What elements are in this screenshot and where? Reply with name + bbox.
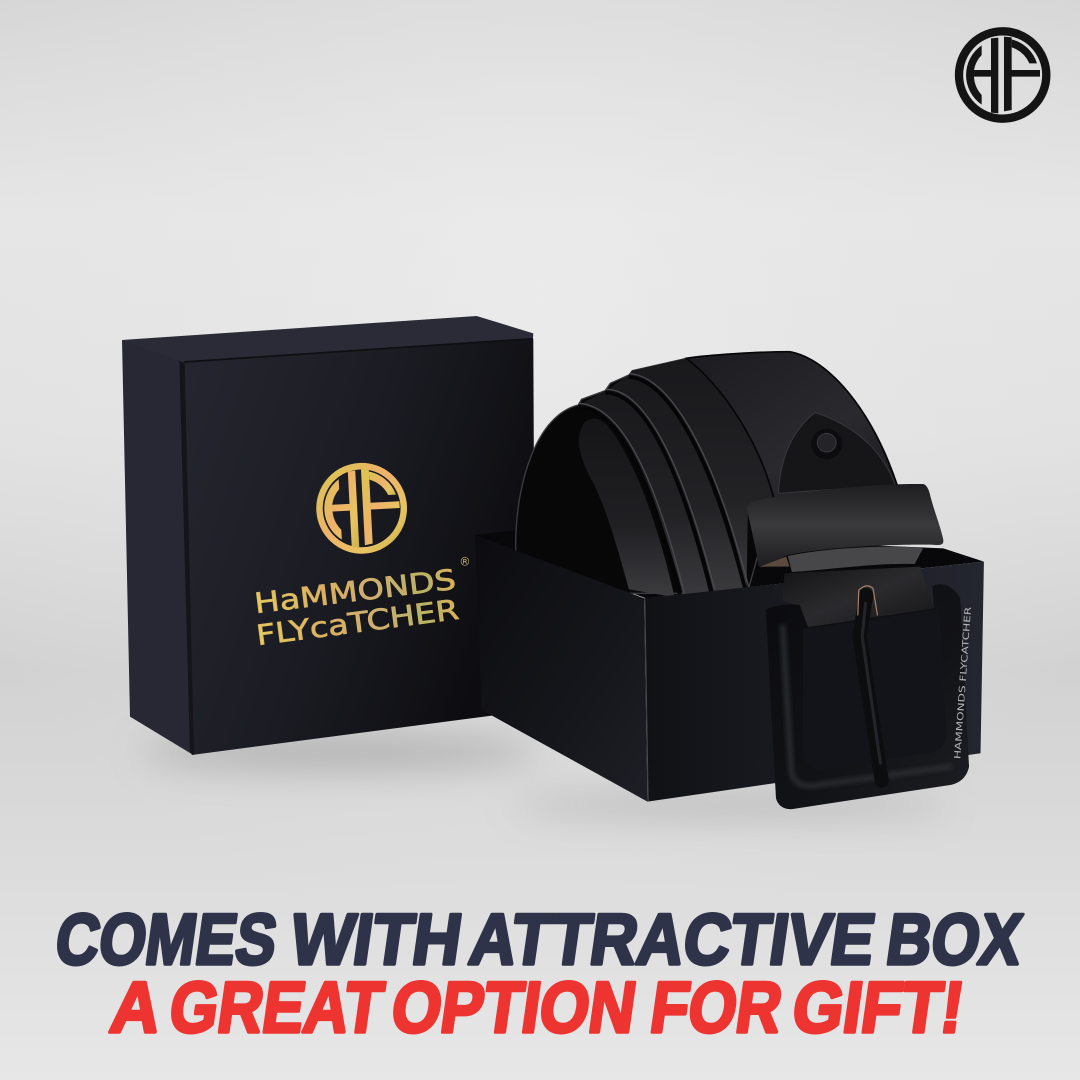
box lid crease xyxy=(184,339,533,362)
box brand wordmark: ® xyxy=(459,555,471,569)
box gold emblem xyxy=(317,464,406,553)
buckle frame xyxy=(766,584,969,809)
headline line 1: ATTRACTIVE xyxy=(465,900,880,980)
headline line 1: BOX xyxy=(882,900,1027,980)
belt strap through buckle xyxy=(783,567,934,627)
open box right face xyxy=(644,562,984,802)
belt and open box xyxy=(475,352,984,809)
keeper worn edge xyxy=(760,557,790,567)
headline line 1: COMES xyxy=(51,900,282,980)
layer 1 xyxy=(579,391,712,597)
strap stud xyxy=(811,429,842,459)
box brand wordmark xyxy=(252,555,471,652)
box left face xyxy=(122,340,193,755)
ground shadow xyxy=(140,734,950,815)
headline line 2: FOR xyxy=(646,968,787,1048)
belt tail xyxy=(579,419,675,597)
headline line 2: GREAT xyxy=(165,968,388,1048)
belt layers xyxy=(578,358,774,597)
headline xyxy=(51,900,1027,1048)
box brand wordmark: HaMMONDS xyxy=(252,563,458,620)
logo: top right HF emblem xyxy=(959,31,1046,119)
box fold shading xyxy=(179,361,194,755)
open box corner highlight xyxy=(645,599,648,802)
strap tip tab xyxy=(778,413,895,493)
box brand wordmark: FLYcaTCHER xyxy=(254,593,461,652)
layer gaps xyxy=(578,377,746,597)
buckle opening shade xyxy=(803,607,947,769)
headline line 1 xyxy=(51,900,1027,980)
belt rear loop xyxy=(516,358,774,593)
headline line 2 xyxy=(106,968,969,1048)
box front face xyxy=(181,339,535,755)
box top face xyxy=(122,316,533,363)
belt rough cut edge xyxy=(788,547,923,572)
buckle pin xyxy=(858,586,882,781)
belt keeper loop xyxy=(747,484,943,567)
open box left face xyxy=(475,535,648,802)
layer 3 xyxy=(629,358,774,590)
headline line 2: GIFT! xyxy=(788,968,969,1048)
headline line 1: WITH xyxy=(286,900,467,980)
buckle engraved text: HAMMONDS FLYCATCHER xyxy=(953,607,974,759)
layer edge highlights xyxy=(579,374,749,596)
belt top strap xyxy=(686,352,898,500)
headline line 2: OPTION xyxy=(387,968,641,1048)
headline line 2: A xyxy=(106,968,166,1048)
layer 2 xyxy=(606,375,746,593)
open box inner back xyxy=(475,530,984,598)
left gift box xyxy=(122,316,535,755)
buckle highlights xyxy=(783,627,950,786)
